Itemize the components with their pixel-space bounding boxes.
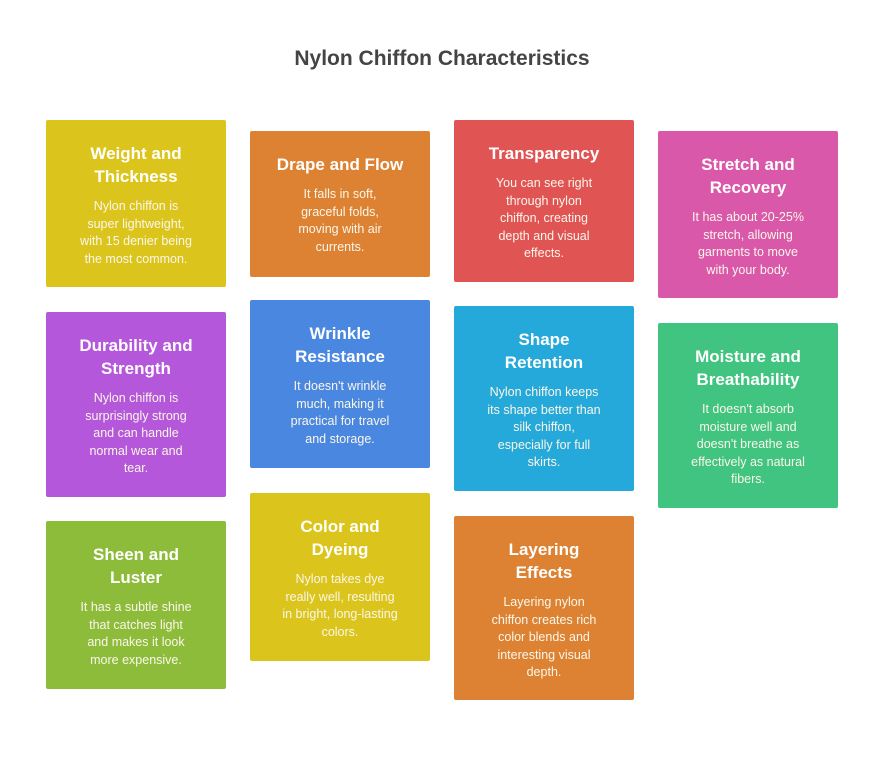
- card: durability and strength: Durability and: [79, 336, 193, 355]
- card: sheen and luster: that catches light: [89, 618, 183, 632]
- card: layering effects: Layering: [509, 540, 579, 559]
- card: durability and strength: normal wear and: [89, 444, 183, 458]
- card: weight and thickness: Weight and: [90, 144, 182, 163]
- card: moisture and breathability: effectively as natural: [691, 454, 805, 468]
- card: drape and flow: It falls in soft,: [304, 187, 376, 201]
- card: color and dyeing: Color and: [300, 517, 380, 536]
- card: layering effects: interesting visual: [497, 648, 591, 662]
- card: weight and thickness: Nylon chiffon is: [94, 199, 178, 213]
- card: shape retention: Retention: [505, 353, 583, 372]
- card: durability and strength: [46, 312, 226, 497]
- card: durability and strength: and can handle: [93, 426, 179, 440]
- card: wrinkle resistance: [250, 300, 430, 468]
- card: moisture and breathability: Breathability: [696, 370, 799, 389]
- card: shape retention: [454, 306, 634, 491]
- card: wrinkle resistance: and storage.: [305, 432, 375, 446]
- card: sheen and luster: more expensive.: [90, 652, 182, 666]
- card: drape and flow: graceful folds,: [301, 204, 379, 218]
- card: wrinkle resistance: practical for travel: [291, 414, 389, 428]
- card: moisture and breathability: doesn't breathe as: [697, 437, 799, 451]
- card: color and dyeing: [250, 493, 430, 661]
- card: drape and flow: moving with air: [298, 222, 382, 236]
- title: Nylon Chiffon Characteristics: [294, 47, 590, 70]
- card: stretch and recovery: stretch, allowing: [703, 228, 793, 242]
- card: stretch and recovery: garments to move: [698, 245, 798, 259]
- card: transparency: chiffon, creating: [500, 211, 588, 225]
- card: weight and thickness: super lightweight,: [87, 216, 185, 230]
- card: wrinkle resistance: It doesn't wrinkle: [294, 379, 386, 393]
- card: durability and strength: surprisingly strong: [85, 408, 187, 422]
- card: stretch and recovery: Stretch and: [701, 155, 795, 174]
- card: weight and thickness: with 15 denier being: [80, 234, 192, 248]
- card: layering effects: Effects: [516, 563, 572, 582]
- card: shape retention: Shape: [518, 330, 570, 349]
- card: transparency: depth and visual: [498, 228, 590, 242]
- card: layering effects: depth.: [527, 665, 561, 679]
- card: durability and strength: Strength: [101, 359, 171, 378]
- card: transparency: effects.: [524, 246, 564, 260]
- card: moisture and breathability: It doesn't absorb: [702, 402, 794, 416]
- card: layering effects: chiffon creates rich: [492, 612, 596, 626]
- card: layering effects: color blends and: [498, 630, 590, 644]
- card: shape retention: its shape better than: [487, 402, 601, 416]
- card: durability and strength: tear.: [124, 461, 148, 475]
- card: stretch and recovery: with your body.: [706, 262, 790, 276]
- card: sheen and luster: [46, 521, 226, 689]
- card: transparency: Transparency: [489, 144, 599, 163]
- card: layering effects: Layering nylon: [503, 595, 585, 609]
- card: stretch and recovery: It has about 20-25%: [692, 210, 804, 224]
- card: stretch and recovery: Recovery: [710, 178, 786, 197]
- card: weight and thickness: [46, 120, 226, 287]
- card: color and dyeing: Dyeing: [312, 540, 368, 559]
- card: moisture and breathability: Moisture and: [695, 347, 801, 366]
- card: transparency: You can see right: [496, 176, 592, 190]
- card: shape retention: Nylon chiffon keeps: [490, 385, 598, 399]
- card: sheen and luster: and makes it look: [87, 635, 185, 649]
- card: wrinkle resistance: Wrinkle: [309, 324, 371, 343]
- card: sheen and luster: It has a subtle shine: [80, 600, 192, 614]
- card: shape retention: silk chiffon,: [513, 420, 575, 434]
- card: weight and thickness: the most common.: [85, 252, 187, 266]
- card: sheen and luster: Sheen and: [93, 545, 179, 564]
- card: drape and flow: [250, 131, 430, 277]
- card: color and dyeing: colors.: [322, 624, 358, 638]
- card: layering effects: [454, 516, 634, 700]
- card: transparency: through nylon: [506, 194, 582, 208]
- card: drape and flow: Drape and Flow: [277, 155, 403, 174]
- card: durability and strength: Nylon chiffon is: [94, 391, 178, 405]
- card: moisture and breathability: fibers.: [731, 472, 765, 486]
- card: weight and thickness: Thickness: [94, 167, 178, 186]
- card: drape and flow: currents.: [316, 240, 364, 254]
- card: wrinkle resistance: much, making it: [296, 396, 384, 410]
- card: shape retention: especially for full: [498, 438, 590, 452]
- card: color and dyeing: Nylon takes dye: [296, 572, 384, 586]
- card: moisture and breathability: moisture well and: [699, 420, 797, 434]
- card: moisture and breathability: [658, 323, 838, 508]
- card: stretch and recovery: [658, 131, 838, 298]
- card: transparency: [454, 120, 634, 282]
- card: color and dyeing: in bright, long-lasting: [282, 607, 398, 621]
- card: wrinkle resistance: Resistance: [295, 347, 385, 366]
- card: shape retention: skirts.: [528, 455, 560, 469]
- card: color and dyeing: really well, resulting: [285, 590, 395, 604]
- card: sheen and luster: Luster: [110, 568, 162, 587]
